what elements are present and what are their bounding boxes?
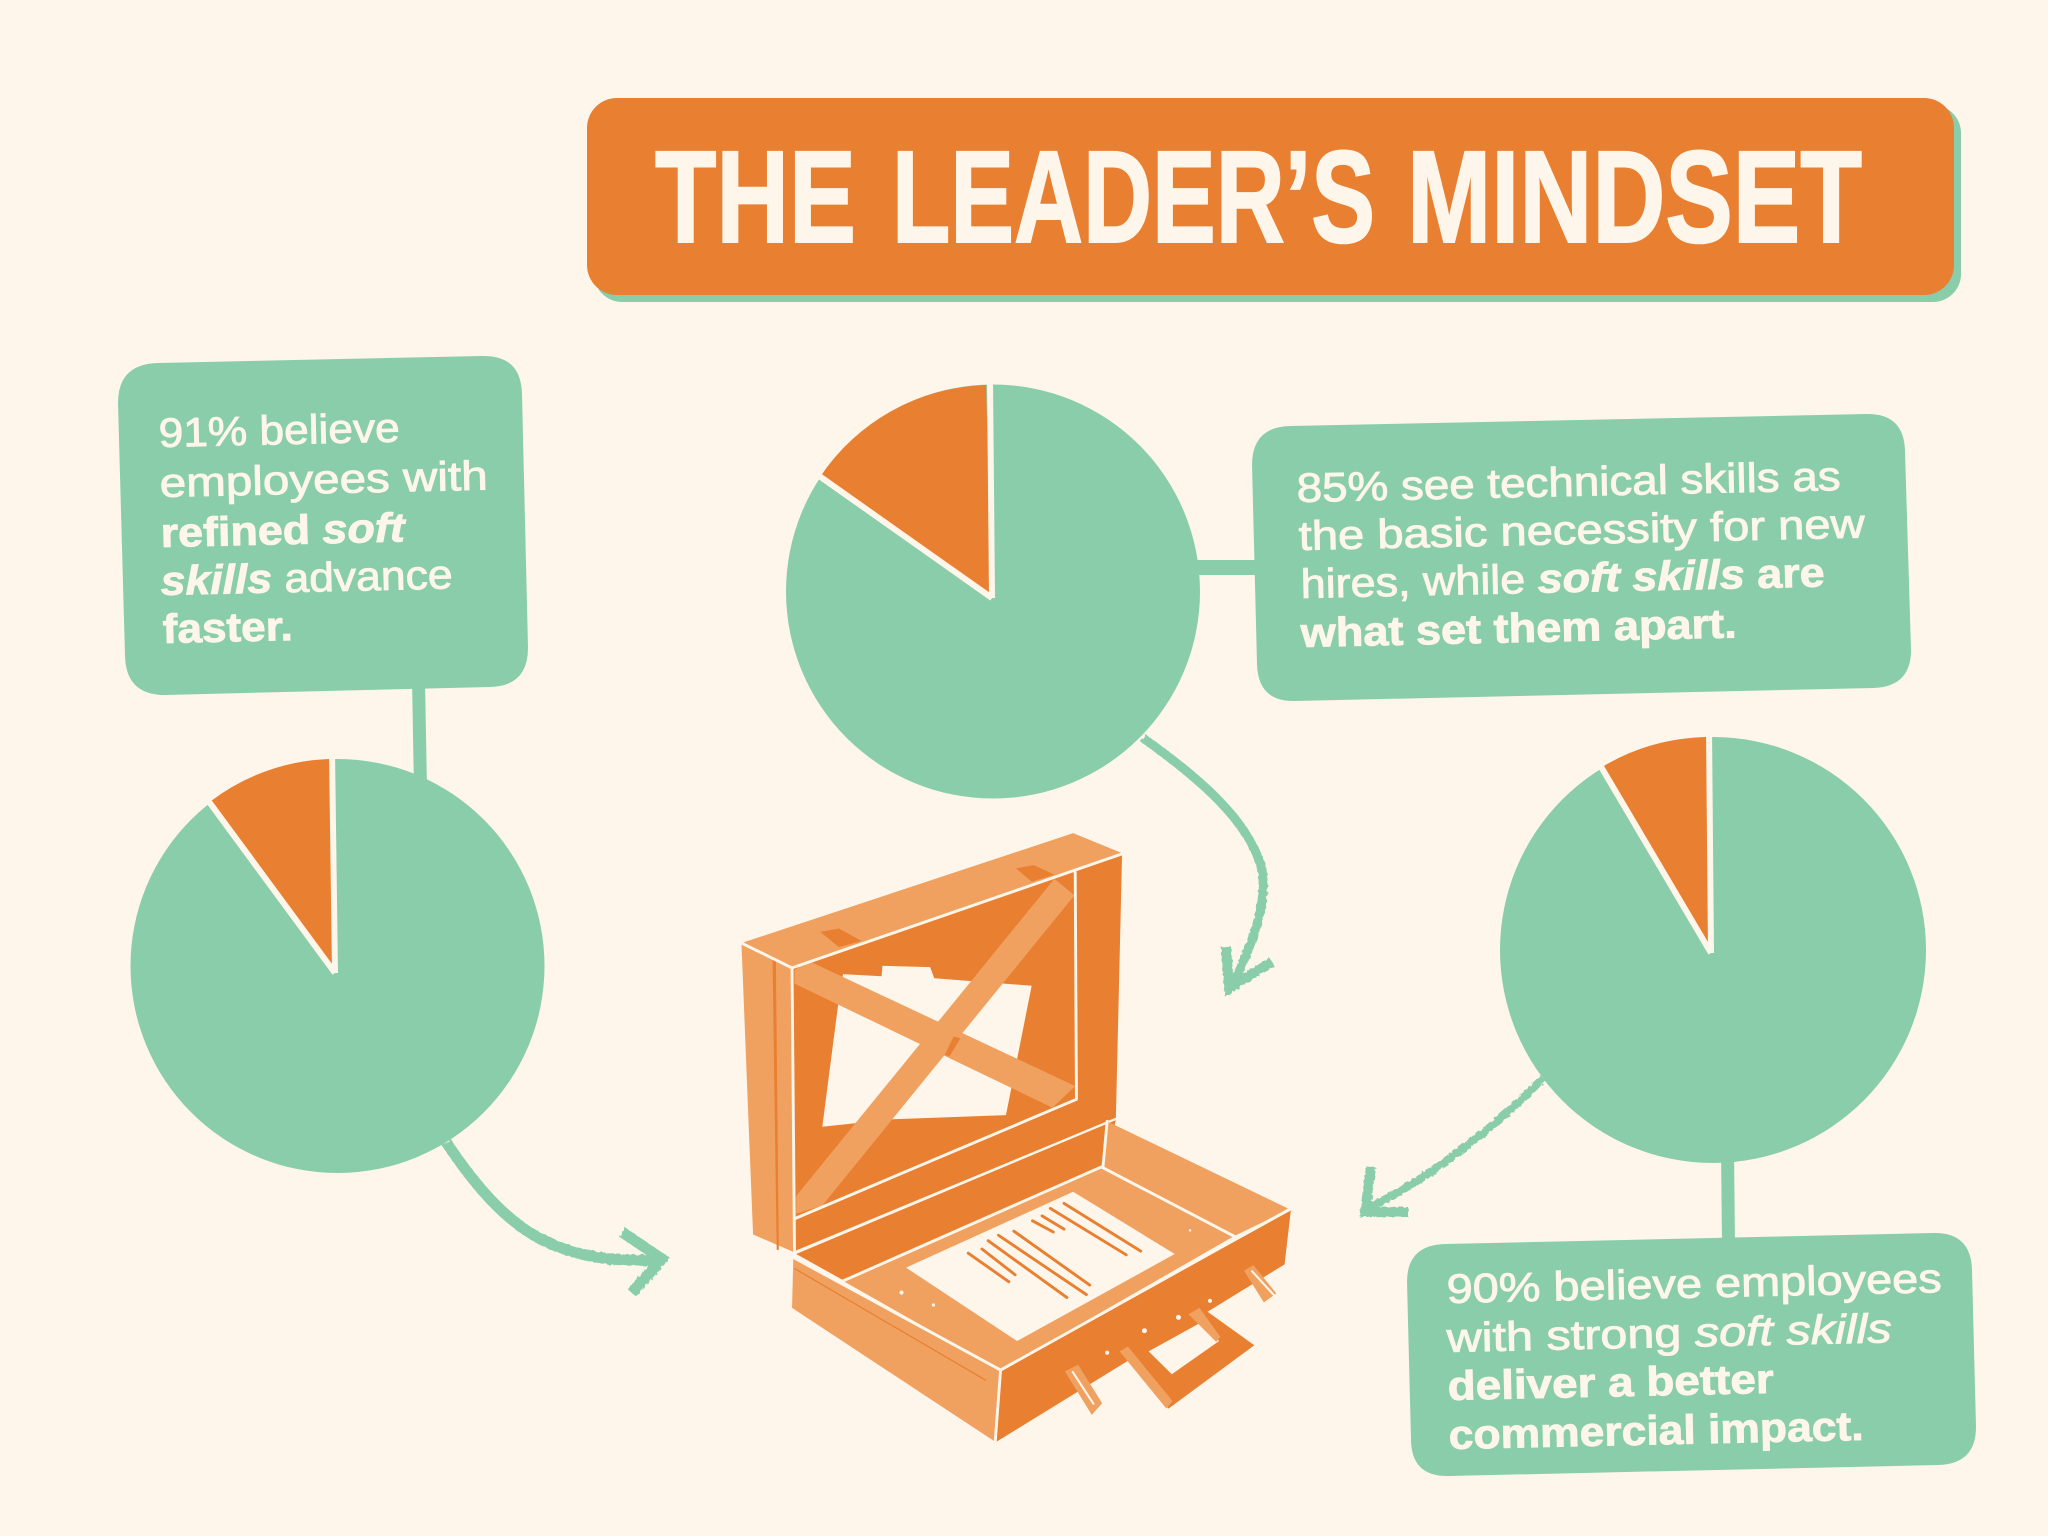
document text lines [968, 1203, 1141, 1298]
title banner [587, 98, 1961, 302]
lid interior [792, 854, 1122, 1253]
lid straps [795, 961, 1075, 1108]
panel: 91% callout: employees with [159, 453, 488, 506]
base lines [795, 1121, 1290, 1442]
rivets [899, 1229, 1212, 1355]
pie chart: 91% [130, 752, 544, 1173]
base floor [843, 1167, 1234, 1370]
base front side [996, 1210, 1291, 1442]
panel: 85% callout: 85% see technical skills as [1296, 453, 1841, 511]
pie chart: 85% [786, 378, 1200, 798]
panel: 90% callout: deliver a better [1447, 1356, 1774, 1409]
handle [1120, 1307, 1254, 1409]
connector: left card to left pie [412, 680, 427, 790]
panel: 90% callout: 90% believe employees [1446, 1255, 1942, 1312]
connector: middle pie to card [1190, 560, 1262, 575]
arrow: middle pie to briefcase [1143, 738, 1272, 988]
title banner: THE [655, 123, 856, 270]
panel: 90% callout: with strong soft skills [1445, 1305, 1892, 1361]
title banner: MINDSET [1407, 123, 1862, 270]
panel: 90% callout: commercial impact. [1448, 1403, 1864, 1458]
lid side [741, 943, 793, 1252]
icon: open briefcase [741, 833, 1291, 1442]
panel: 85% callout: hires, while soft skills are [1300, 549, 1825, 607]
folder sheet [822, 966, 1032, 1127]
document [906, 1192, 1175, 1341]
base back wall [796, 1120, 1116, 1280]
base front-left side [792, 1258, 1001, 1442]
panel: 91% callout: faster. [162, 603, 293, 652]
connector: right pie to card [1721, 1150, 1735, 1245]
panel: 85% callout: the basic necessity for new [1298, 501, 1865, 559]
pie chart: 90% [1500, 730, 1926, 1163]
base right wall [1103, 1121, 1290, 1236]
panel: 91% callout: refined soft [160, 504, 408, 556]
lid top edge [741, 833, 1122, 968]
panel: 91% callout: 91% believe [158, 405, 400, 456]
panel: 90% callout [1407, 1233, 1976, 1476]
title banner: LEADER’S [892, 123, 1375, 270]
panel: 85% callout: what set them apart. [1299, 600, 1737, 656]
latches [1065, 1365, 1102, 1415]
panel: 85% callout [1252, 414, 1911, 701]
lid lines [741, 854, 1122, 1253]
panel: 91% callout: skills advance [160, 551, 453, 604]
arrow: right pie to briefcase [1365, 1078, 1543, 1212]
arrow: left pie to briefcase [446, 1142, 662, 1293]
panel: 91% callout [118, 356, 528, 695]
